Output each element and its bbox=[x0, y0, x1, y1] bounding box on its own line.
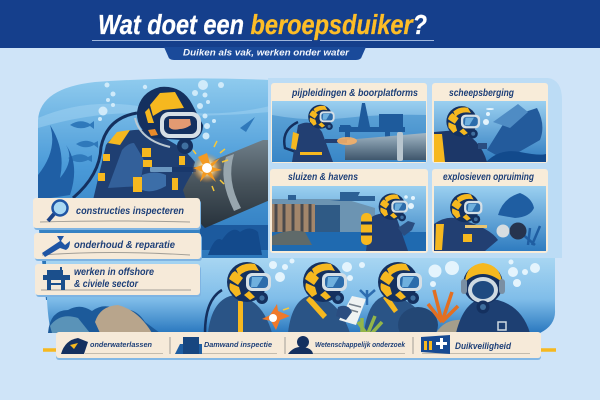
heading: pijpleidingen & boorplatforms bbox=[291, 88, 418, 99]
legend item: Damwand inspectie bbox=[175, 337, 272, 354]
subtitle tab: Duiken als vak, werken onder water bbox=[183, 48, 350, 58]
heading: sluizen & havens bbox=[288, 172, 358, 183]
heading: scheepsberging bbox=[449, 88, 514, 99]
fish silhouettes bbox=[68, 117, 255, 162]
suit straps bbox=[133, 148, 185, 192]
label: werken in offshore & civiele sector: & civiele sector bbox=[74, 279, 139, 290]
tank bbox=[108, 130, 130, 145]
explosive sphere bbox=[496, 222, 526, 240]
sunken ship bbox=[487, 104, 542, 160]
heading: explosieven opruiming bbox=[443, 172, 534, 183]
diver bbox=[434, 193, 498, 251]
legend item: Duikveiligheid bbox=[421, 335, 511, 354]
diver: front view bbox=[456, 263, 530, 333]
label: constructies inspecteren: constructies inspecteren bbox=[76, 206, 184, 217]
legend item: Duikveiligheid: Duikveiligheid bbox=[455, 341, 511, 351]
bubbles bbox=[269, 258, 540, 287]
helmet bbox=[137, 87, 203, 140]
panel: explosieven opruiming bbox=[432, 169, 548, 253]
spark bbox=[262, 304, 303, 330]
legend item: Wetenschappelijk onderzoek bbox=[288, 336, 406, 354]
header band bbox=[0, 0, 600, 48]
diver bbox=[434, 106, 487, 162]
label: onderhoud & reparatie bbox=[34, 233, 202, 261]
panel: sluizen & havens bbox=[270, 169, 428, 253]
subtitle tab bbox=[164, 47, 366, 60]
tool and glove bbox=[150, 167, 174, 172]
bubbles bbox=[483, 108, 494, 125]
panel: scheepsberging bbox=[432, 83, 548, 163]
panel: pijpleidingen & boorplatforms bbox=[271, 83, 427, 163]
diver bbox=[284, 105, 357, 162]
oil platform bbox=[339, 103, 405, 142]
icon: magnifier bbox=[48, 200, 68, 221]
pipe bbox=[183, 140, 270, 228]
rock bbox=[272, 231, 312, 245]
bottom legend bar bbox=[43, 332, 556, 360]
visor and face bbox=[160, 112, 201, 138]
submerged object bbox=[498, 193, 534, 218]
torso bbox=[93, 130, 195, 200]
four divers bbox=[205, 258, 540, 343]
legend item: onderwaterlassen: onderwaterlassen bbox=[90, 340, 152, 349]
coral bbox=[520, 226, 540, 245]
main illustration panel bbox=[38, 78, 270, 300]
bottom scene bbox=[46, 258, 555, 343]
coral bbox=[428, 290, 458, 322]
icon: sheet pile wall bbox=[175, 337, 202, 354]
icon: wrench bbox=[42, 236, 70, 257]
diver bbox=[361, 193, 415, 251]
label: constructies inspecteren bbox=[33, 198, 201, 230]
diver: notes bbox=[288, 262, 366, 333]
label: werken in offshore & civiele sector bbox=[35, 264, 201, 297]
icon: safety flag bbox=[421, 335, 450, 354]
title: Wat doet een beroepsduiker? bbox=[98, 9, 427, 40]
icon: offshore platform bbox=[43, 267, 70, 290]
lock gate bbox=[272, 204, 315, 236]
bubbles bbox=[404, 195, 415, 209]
diver: third bbox=[364, 262, 438, 343]
clipboard bbox=[339, 296, 366, 325]
pipeline bbox=[345, 132, 426, 161]
label: onderhoud & reparatie: onderhoud & reparatie bbox=[74, 240, 175, 251]
right panel backdrop bbox=[268, 78, 562, 258]
regulator bbox=[135, 118, 170, 147]
bubbles bbox=[98, 80, 224, 140]
main diver bbox=[73, 87, 270, 228]
icon: welding helmet bbox=[61, 338, 88, 354]
label: werken in offshore & civiele sector: werken in offshore bbox=[74, 267, 154, 278]
legend item: onderwaterlassen bbox=[61, 338, 152, 354]
seaweed bbox=[38, 125, 270, 255]
diver: welding bbox=[205, 262, 272, 333]
harbour wall bbox=[272, 199, 375, 236]
legend item: Wetenschappelijk onderzoek: Wetenschappelijk onderzoek bbox=[315, 342, 406, 349]
rocks bbox=[48, 305, 160, 333]
welding spark bbox=[192, 141, 228, 191]
air hose bbox=[73, 113, 137, 198]
legend item: Damwand inspectie: Damwand inspectie bbox=[204, 340, 272, 349]
icon: researcher silhouette bbox=[288, 336, 313, 354]
